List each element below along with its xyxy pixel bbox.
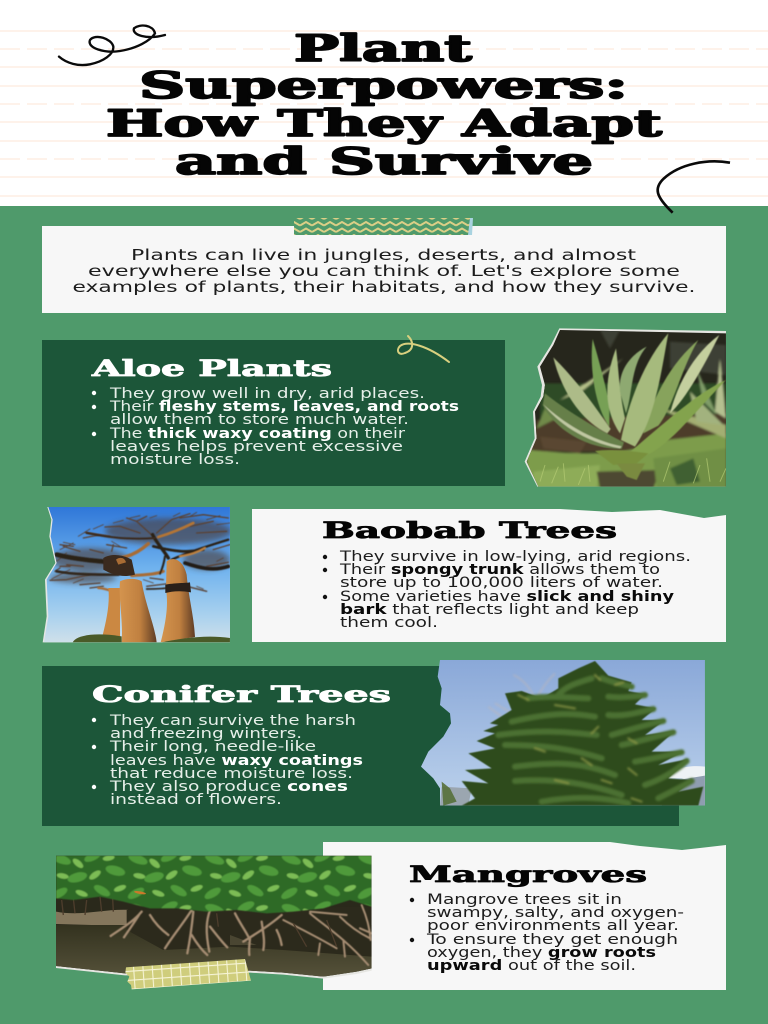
bullet list: instead of flowers. — [110, 792, 282, 808]
title: Superpowers: — [139, 65, 628, 107]
icon: black curved stroke — [658, 161, 730, 213]
bullet list: upward out of the soil. — [427, 958, 636, 974]
green background — [0, 206, 768, 1024]
photo: baobab trees — [40, 507, 232, 642]
heading: Mangroves — [409, 862, 647, 888]
bullet list: They can survive the harsh — [109, 713, 356, 729]
bullet list: and freezing winters. — [110, 726, 302, 742]
leaf canopy — [56, 856, 372, 913]
bullet list: They survive in low-lying, arid regions. — [339, 549, 691, 565]
crown twigs — [50, 512, 230, 591]
washi tape — [294, 218, 473, 235]
intro text — [72, 246, 696, 296]
icon: yellow squiggle — [398, 336, 449, 362]
bullet list: Mangrove trees sit in — [427, 892, 622, 908]
title: How They Adapt — [106, 103, 663, 145]
bullet list: The thick waxy coating on their — [109, 426, 405, 442]
grid tape — [125, 959, 251, 989]
panel: conifer trees — [42, 666, 679, 826]
header — [0, 26, 768, 196]
intro text: Plants can live in jungles, deserts, and almost — [131, 246, 636, 264]
bullet list — [323, 549, 691, 631]
bullet list: Their long, needle-like — [109, 739, 316, 755]
panel: baobab trees — [252, 509, 726, 642]
intro panel — [42, 218, 726, 313]
crown haze — [50, 518, 232, 583]
title — [106, 28, 663, 183]
photo: aloe plant — [520, 325, 730, 490]
bullet list: They also produce cones — [109, 779, 348, 795]
bullet list: To ensure they get enough — [426, 932, 678, 948]
bullet list — [410, 892, 684, 974]
panel: mangroves — [323, 842, 726, 990]
intro text: everywhere else you can think of. Let's explore some — [88, 262, 680, 280]
photo: mangroves — [56, 856, 372, 979]
heading: Conifer Trees — [92, 682, 391, 708]
icon: black squiggle — [59, 26, 165, 65]
bullet list: swampy, salty, and oxygen- — [427, 905, 684, 921]
branch highlights — [498, 675, 692, 803]
trunks — [102, 588, 120, 636]
photo: conifer tree — [415, 660, 705, 806]
bullet list: Some varieties have slick and shiny — [340, 589, 674, 605]
title: Plant — [294, 28, 473, 70]
intro text: examples of plants, their habitats, and how they survive. — [72, 278, 696, 296]
bullet list: moisture loss. — [110, 452, 240, 468]
bullet list — [92, 386, 459, 468]
bullet list: They grow well in dry, arid places. — [109, 386, 425, 402]
title: and Survive — [175, 141, 593, 183]
bullet list: leaves have waxy coatings — [110, 753, 363, 769]
bullet list: oxygen, they grow roots — [427, 945, 656, 961]
bullet list — [92, 713, 363, 808]
bullet list: that reduce moisture loss. — [110, 766, 353, 782]
heading: Baobab Trees — [322, 518, 617, 544]
bullet list: bark that reflects light and keep — [340, 602, 639, 618]
roots — [111, 905, 372, 965]
panel: aloe plants — [42, 336, 505, 486]
tree silhouette — [462, 661, 703, 806]
bullet list: allow them to store much water. — [110, 412, 409, 428]
bullet list: Their spongy trunk allows them to — [339, 562, 660, 578]
bullet list: poor environments all year. — [427, 918, 679, 934]
bullet list: them cool. — [340, 615, 438, 631]
heading: Aloe Plants — [90, 356, 332, 382]
thick branches — [57, 523, 228, 591]
bullet list: store up to 100,000 liters of water. — [340, 575, 663, 591]
bullet list: Their fleshy stems, leaves, and roots — [109, 399, 459, 415]
bullet list: leaves helps prevent excessive — [110, 439, 403, 455]
